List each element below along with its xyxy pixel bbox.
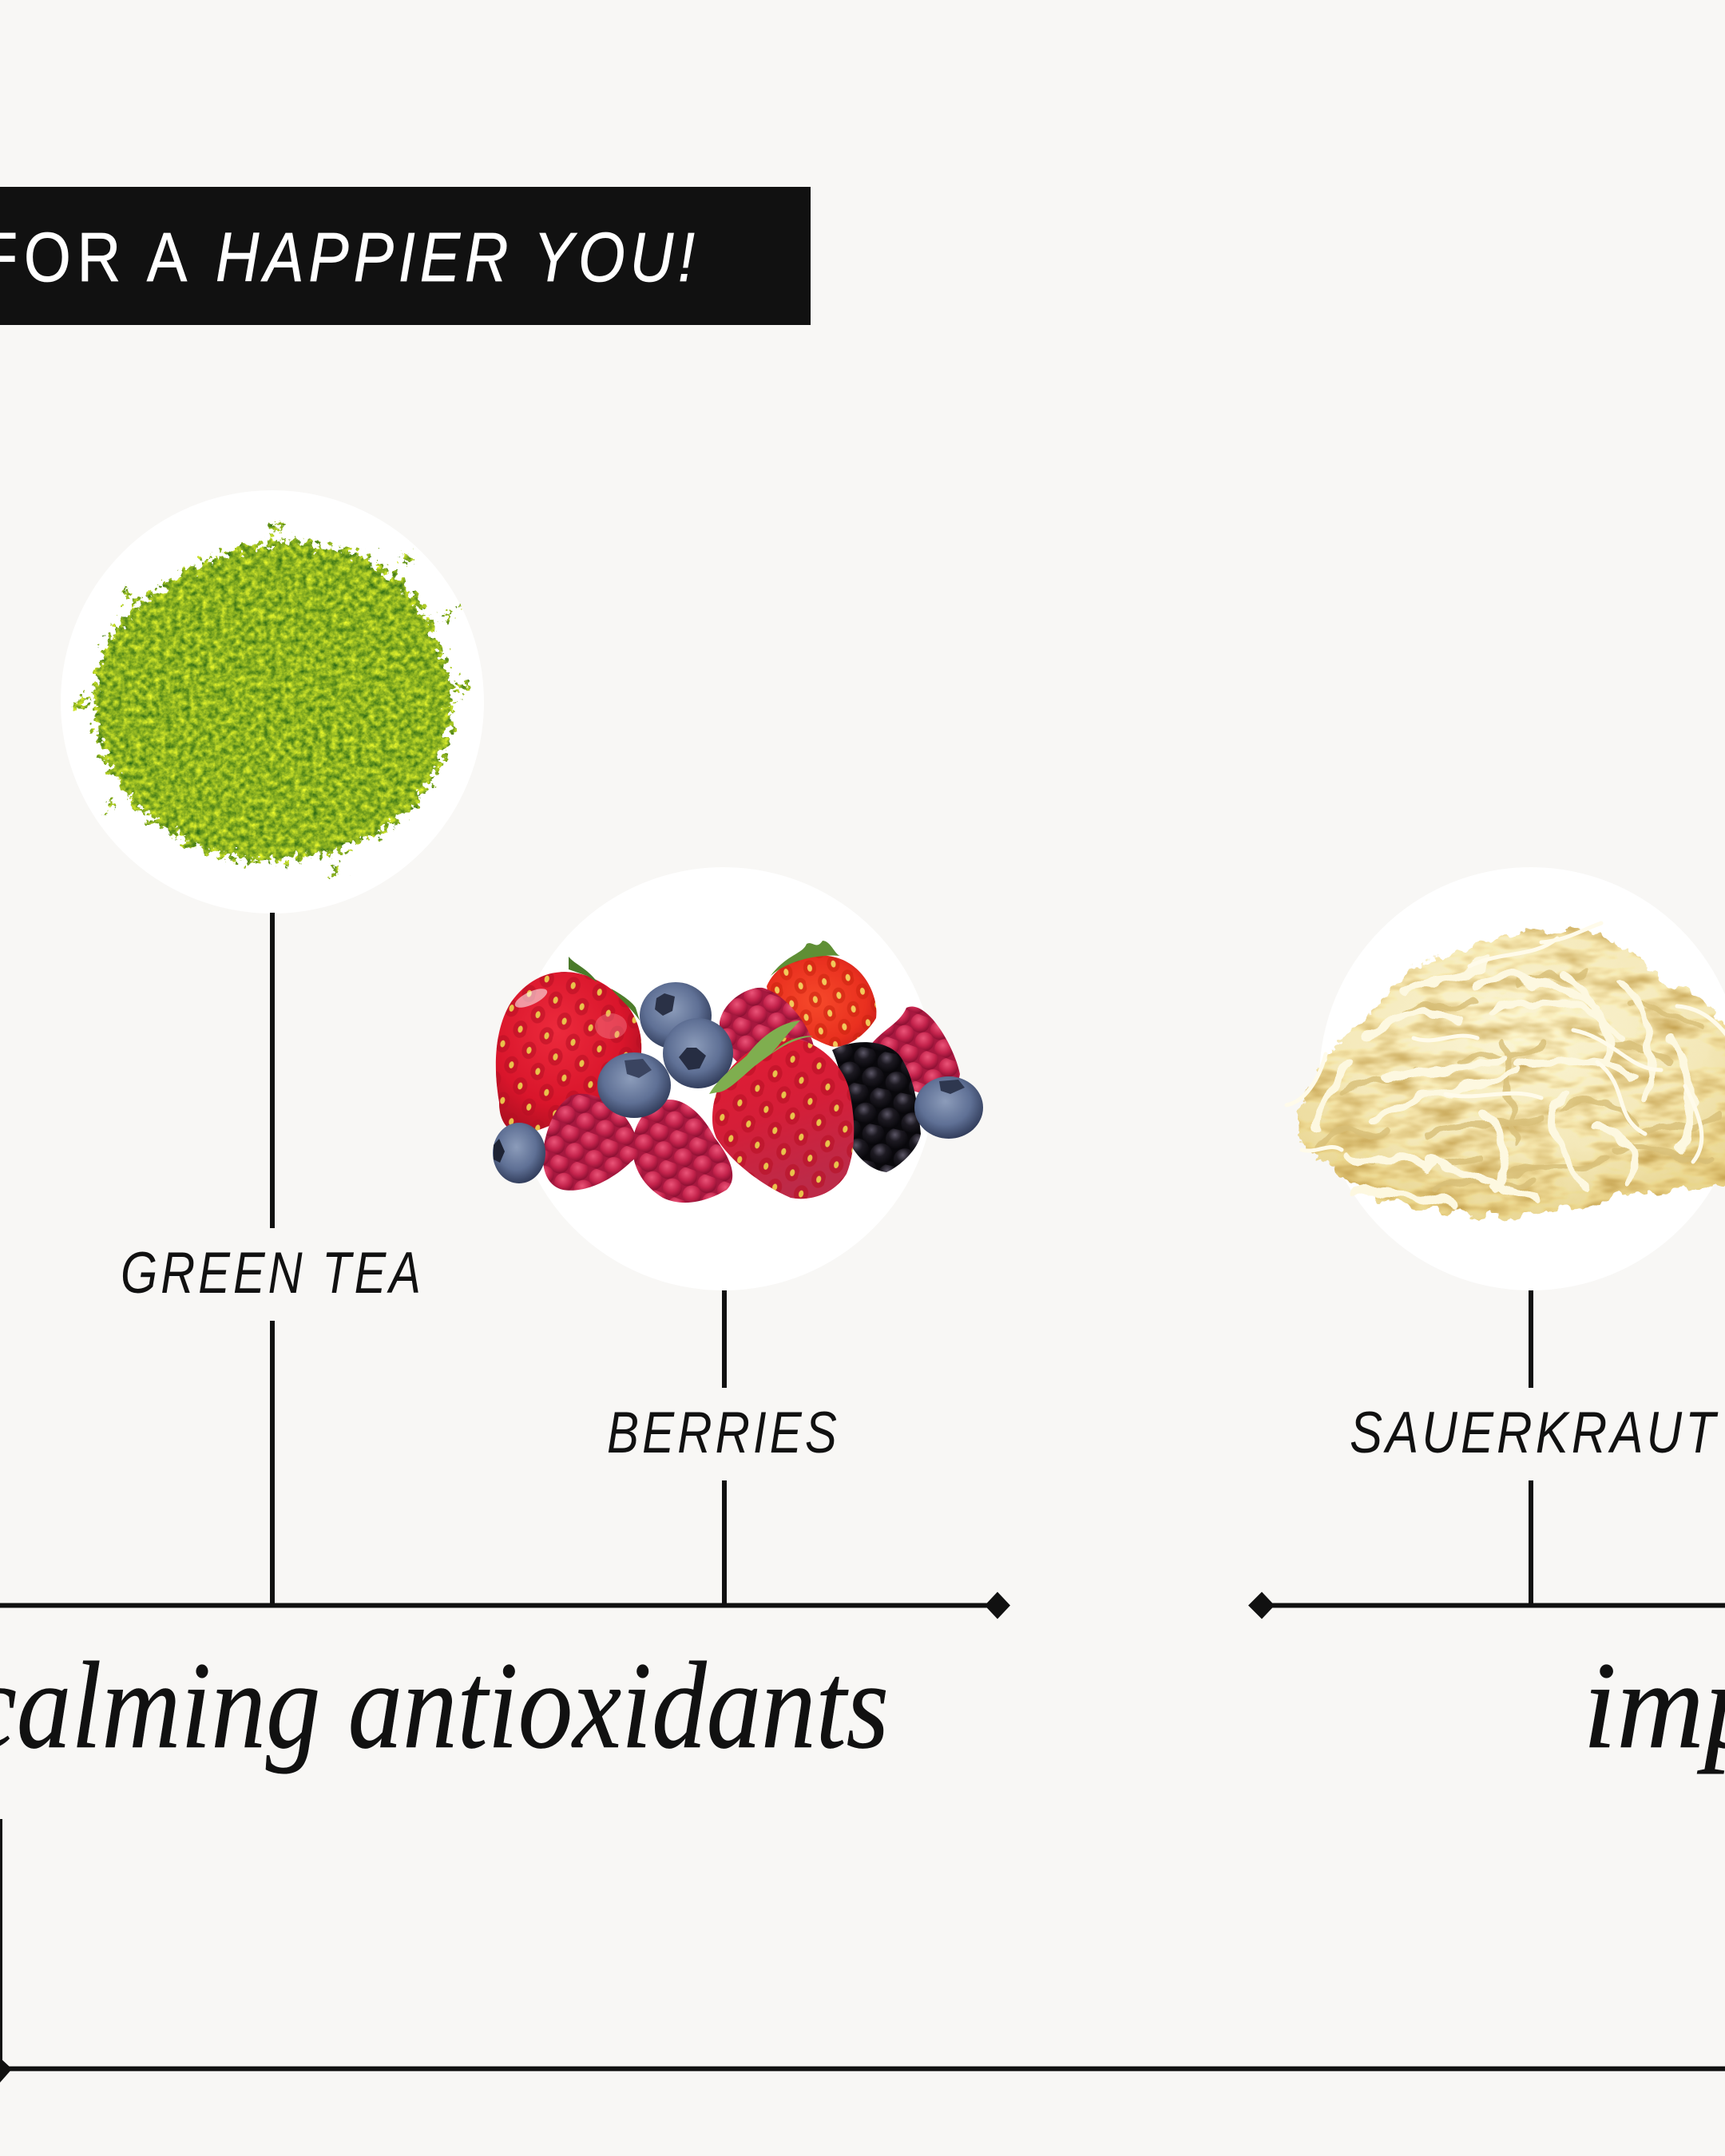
raspberry back right bbox=[864, 1006, 960, 1092]
thin shreds bbox=[1287, 923, 1725, 1162]
pile body bbox=[1298, 929, 1725, 1215]
bottom connector bbox=[0, 1819, 1725, 2083]
stem lower bbox=[1529, 1480, 1533, 1605]
stem upper bbox=[1529, 1290, 1533, 1388]
arrow: left diamond end bbox=[985, 1592, 1010, 1619]
raspberry back centre bbox=[720, 988, 815, 1066]
sauerkraut circle bbox=[1319, 867, 1725, 1290]
icon: mixed berries bbox=[493, 941, 983, 1203]
blackberry bbox=[832, 1042, 921, 1172]
banner text emphasis: HAPPIER YOU! bbox=[216, 219, 700, 296]
right axis line bbox=[1248, 1592, 1725, 1619]
strawberry large left bbox=[496, 957, 641, 1134]
stem upper bbox=[722, 1290, 727, 1388]
stem upper bbox=[270, 913, 275, 1228]
stem lower bbox=[270, 1321, 275, 1605]
strawberry large front bbox=[709, 1021, 854, 1199]
green tea circle bbox=[61, 490, 484, 914]
berries circle bbox=[512, 867, 935, 1290]
stem lower bbox=[722, 1480, 727, 1605]
icon: sauerkraut pile bbox=[1287, 923, 1725, 1215]
blueberries bbox=[493, 982, 983, 1183]
item: berries bbox=[493, 867, 983, 1605]
strawberry back bbox=[767, 941, 876, 1047]
label: green tea: GREEN TEA bbox=[121, 1241, 424, 1306]
title banner bbox=[0, 187, 811, 325]
label: berries: BERRIES bbox=[607, 1401, 840, 1465]
item: green tea bbox=[61, 490, 484, 1605]
shadow shreds bbox=[1318, 974, 1717, 1190]
arrow: right diamond start bbox=[1248, 1592, 1275, 1619]
raspberry lower left bbox=[543, 1094, 638, 1191]
left axis line bbox=[0, 1592, 1010, 1619]
icon: matcha powder bbox=[75, 522, 467, 876]
light shreds bbox=[1318, 958, 1691, 1206]
item: sauerkraut bbox=[1287, 867, 1725, 1605]
raspberry lower centre bbox=[632, 1100, 732, 1203]
arrow: bottom diamond bbox=[0, 2058, 12, 2083]
